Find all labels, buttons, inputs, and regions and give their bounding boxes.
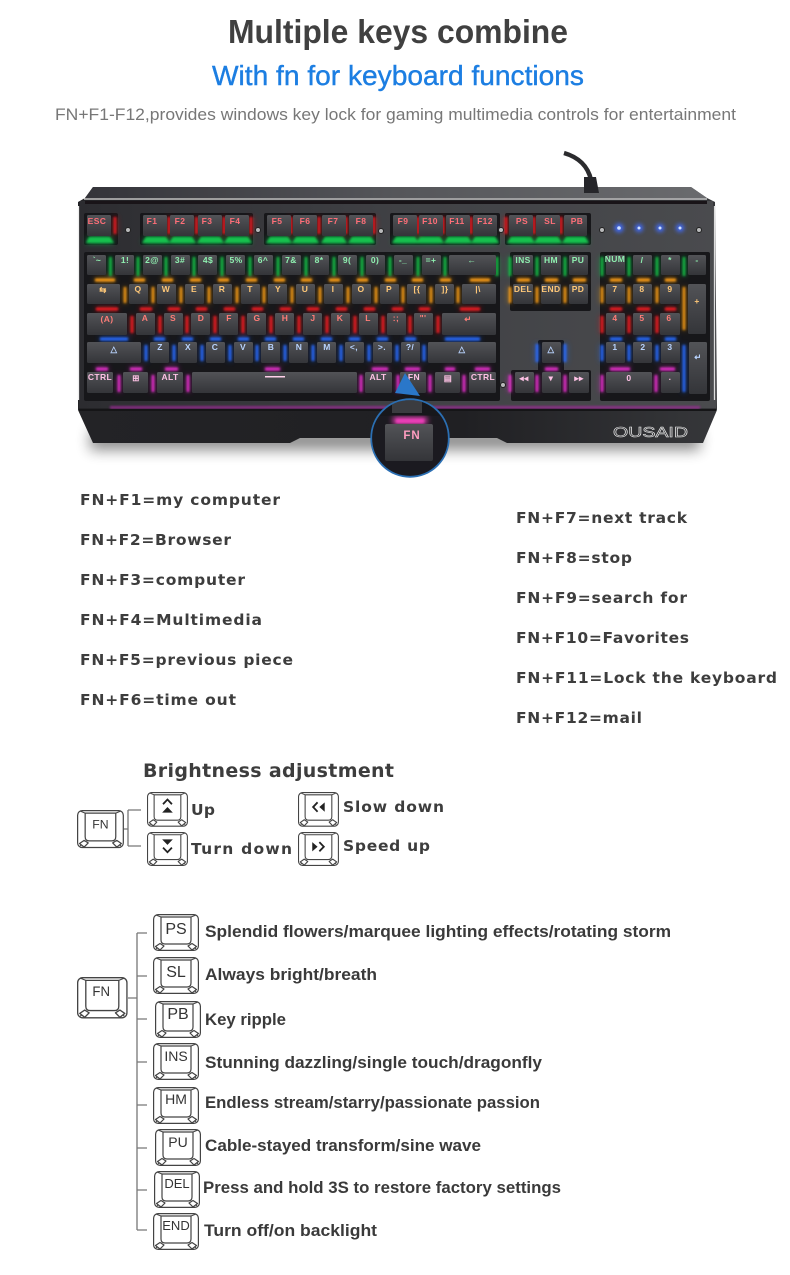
bottom key row: [87, 372, 680, 393]
bottom key row: 0: [626, 373, 632, 383]
LED indicators: [614, 224, 684, 232]
speed up label: Speed up: [343, 837, 430, 855]
FN key: FN: [92, 817, 109, 832]
PS effect: Splendid flowers/marquee lighting effects/rotating storm: [205, 922, 671, 941]
PS key: [154, 915, 198, 950]
subtitle: With fn for keyboard functions: [212, 60, 584, 91]
number key row: HM: [544, 255, 558, 265]
function key row: [87, 215, 587, 236]
red row glow: [96, 309, 676, 333]
shift key row: N: [296, 342, 302, 352]
function key row: PS: [516, 216, 528, 226]
END key: END: [162, 1218, 190, 1233]
number key row: 2@: [145, 255, 159, 265]
up key: [148, 793, 187, 826]
home key row: [87, 313, 680, 335]
function key row: F2: [175, 216, 185, 226]
QWERTY key row: T: [247, 284, 253, 294]
PU effect: Cable-stayed transform/sine wave: [205, 1136, 481, 1155]
number key row: 6^: [258, 255, 268, 265]
home key row: J: [310, 313, 316, 323]
F5: FN+F5=previous piece: [80, 651, 293, 669]
number key row: 5%: [229, 255, 243, 265]
shift key row: C: [212, 342, 218, 352]
QWERTY key row: DEL: [514, 284, 532, 294]
title: Multiple keys combine: [228, 13, 568, 50]
number key row: INS: [515, 255, 531, 265]
shift key row: V: [240, 342, 246, 352]
PB key: PB: [167, 1006, 189, 1023]
QWERTY key row: Y: [275, 284, 281, 294]
soft glow halo: [86, 217, 684, 392]
brand logo: OUSAID: [613, 424, 688, 441]
keyboard photo: [78, 153, 717, 477]
home key row: H: [282, 313, 288, 323]
number key row: 8*: [315, 255, 324, 265]
shift key row: ↵: [694, 352, 702, 362]
F7: FN+F7=next track: [516, 509, 688, 527]
bottom key row: ALT: [161, 372, 179, 382]
number key row: `~: [93, 255, 101, 265]
FN key: [78, 978, 127, 1018]
home key row: A: [142, 313, 148, 323]
home key row: 6: [666, 313, 672, 323]
slow down key: [299, 793, 338, 826]
shift key row: >.: [378, 342, 386, 352]
bottom key row: FN: [408, 372, 420, 382]
magnifier: FN key: [371, 399, 449, 477]
function key row: F6: [300, 216, 310, 226]
DEL key: [155, 1172, 199, 1207]
number key row: 3#: [175, 255, 185, 265]
QWERTY key row: [{: [414, 284, 421, 294]
number key row: 1!: [121, 255, 129, 265]
magnifier: FN key: FN: [403, 430, 421, 442]
slow down label: Slow down: [343, 798, 444, 816]
bottom key row: ▾: [548, 373, 554, 383]
shift key row: 1: [612, 342, 618, 352]
brightness adjustment diagram: [78, 793, 444, 865]
number key row: -_: [399, 255, 407, 265]
number key row: -: [695, 255, 699, 265]
QWERTY key row: END: [541, 284, 561, 294]
number key row: =+: [426, 255, 436, 265]
PB effect: Key ripple: [205, 1010, 286, 1029]
shift key row: Z: [157, 342, 163, 352]
shift key row: M: [323, 342, 331, 352]
shift key row: △: [547, 344, 556, 354]
shift key row: △: [458, 344, 467, 354]
blue row glow: [100, 339, 684, 392]
turn down label: Turn down: [191, 840, 292, 858]
bottom key row: CTRL: [88, 372, 112, 382]
keyboard body: [78, 187, 717, 443]
connector tree: [128, 933, 147, 1230]
FN key: [78, 811, 123, 847]
number key row: NUM: [605, 254, 625, 264]
HM effect: Endless stream/starry/passionate passion: [205, 1093, 540, 1112]
shadow: [90, 430, 700, 450]
home key row: :;: [393, 313, 399, 323]
number key row: 4$: [203, 255, 213, 265]
function key row: SL: [544, 216, 556, 226]
QWERTY key row: ]}: [442, 284, 449, 294]
PU key: PU: [168, 1134, 188, 1150]
function key row: F5: [272, 216, 282, 226]
QWERTY key row: ⇆: [99, 285, 107, 295]
INS key: [154, 1044, 198, 1079]
DEL effect: Press and hold 3S to restore factory settings: [203, 1178, 561, 1197]
QWERTY key row: R: [219, 284, 225, 294]
number key row: [87, 254, 706, 275]
shift key row: △: [110, 344, 119, 354]
home key row: 4: [612, 313, 618, 323]
PS key: PS: [165, 921, 187, 938]
QWERTY key row: P: [386, 284, 392, 294]
home key row: G: [253, 313, 261, 323]
cable: [564, 153, 599, 193]
number key row: ←: [468, 255, 476, 265]
FN shortcut list: left column: [80, 491, 293, 709]
QWERTY key row: I: [332, 284, 334, 294]
END effect: Turn off/on backlight: [204, 1221, 377, 1240]
number key row: /: [641, 255, 644, 265]
number key row: *: [668, 255, 672, 265]
FN key: FN: [92, 984, 110, 999]
shift key row: [87, 342, 707, 394]
F2: FN+F2=Browser: [80, 531, 231, 549]
home key row: K: [337, 313, 344, 323]
function key row: ESC: [88, 216, 106, 226]
function key row: F1: [147, 216, 157, 226]
home key row: ↵: [464, 314, 472, 324]
number key row: 0): [371, 255, 379, 265]
F4: FN+F4=Multimedia: [80, 611, 262, 629]
pointer triangle: [395, 373, 420, 396]
INS effect: Stunning dazzling/single touch/dragonfly: [205, 1053, 543, 1072]
shift key row: X: [185, 342, 191, 352]
home key row: "': [420, 313, 426, 323]
shift key row: ?/: [406, 342, 414, 352]
up label: Up: [191, 801, 215, 819]
SL effect: Always bright/breath: [205, 965, 377, 984]
QWERTY key row: O: [357, 284, 365, 294]
bottom key row: ▤: [444, 373, 452, 383]
bottom key row: ⊞: [132, 373, 140, 383]
QWERTY key row: W: [162, 284, 171, 294]
magenta row glow: [96, 369, 675, 392]
function key row: F7: [328, 216, 338, 226]
HM key: [154, 1088, 198, 1123]
function key row: F10: [422, 216, 438, 226]
PU key: [156, 1130, 200, 1165]
QWERTY key row: +: [694, 296, 700, 306]
speed up key: [299, 833, 338, 865]
function key row: PB: [571, 216, 583, 226]
F6: FN+F6=time out: [80, 691, 237, 709]
backlight glow: [86, 217, 684, 392]
function key row: F4: [230, 216, 240, 226]
DEL key: DEL: [164, 1176, 190, 1191]
QWERTY key row: 7: [612, 284, 618, 294]
number key row: PU: [572, 255, 584, 265]
bottom key row: ALT: [369, 372, 387, 382]
turn down key: [148, 833, 187, 865]
number key row: 7&: [285, 255, 297, 265]
F1: FN+F1=my computer: [80, 491, 280, 509]
function key row: F3: [202, 216, 212, 226]
number key row: 9(: [343, 255, 351, 265]
F8: FN+F8=stop: [516, 549, 632, 567]
home key row: D: [198, 313, 204, 323]
F9: FN+F9=search for: [516, 589, 687, 607]
INS key: INS: [164, 1048, 188, 1064]
function row glow: [86, 217, 589, 243]
SL key: [154, 958, 198, 993]
bottom key row: ▸▸: [573, 373, 584, 383]
QWERTY key row: [87, 284, 706, 334]
home key row: 5: [639, 313, 645, 323]
SL key: SL: [166, 964, 186, 981]
home key row: F: [226, 313, 232, 323]
function key row: F11: [449, 216, 465, 226]
QWERTY key row: 8: [639, 284, 645, 294]
FN shortcut list: right column: [516, 509, 777, 727]
brightness heading: Brightness adjustment: [143, 760, 394, 782]
shift key row: <,: [350, 342, 358, 352]
QWERTY key row: U: [302, 284, 308, 294]
home key row: L: [365, 313, 371, 323]
home key row: (A): [100, 314, 114, 324]
function key row: F8: [356, 216, 366, 226]
orange row glow: [95, 280, 684, 330]
F10: FN+F10=Favorites: [516, 629, 689, 647]
function key row: F9: [398, 216, 408, 226]
END key: [154, 1214, 198, 1249]
bottom key row: ◂◂: [518, 373, 529, 383]
home key row: S: [170, 313, 176, 323]
shift key row: 3: [667, 342, 673, 352]
function key row: F12: [477, 216, 493, 226]
F11: FN+F11=Lock the keyboard: [516, 669, 777, 687]
F3: FN+F3=computer: [80, 571, 245, 589]
HM key: HM: [165, 1091, 187, 1107]
bottom key row: CTRL: [471, 372, 495, 382]
dark key wells: [84, 213, 710, 401]
shift key row: 2: [640, 342, 646, 352]
description: FN+F1-F12,provides windows key lock for gaming multimedia controls for entertainment: [55, 106, 736, 124]
lighting effects diagram: [78, 915, 671, 1249]
PB key: [156, 1002, 200, 1037]
QWERTY key row: Q: [134, 284, 142, 294]
QWERTY key row: PD: [572, 284, 584, 294]
QWERTY key row: E: [191, 284, 197, 294]
F12: FN+F12=mail: [516, 709, 642, 727]
connector: [124, 810, 141, 846]
QWERTY key row: |\: [475, 284, 481, 294]
bottom key row: .: [669, 372, 671, 382]
number row glow: [110, 257, 684, 276]
QWERTY key row: 9: [667, 284, 673, 294]
shift key row: B: [268, 342, 274, 352]
screws: [126, 228, 702, 388]
